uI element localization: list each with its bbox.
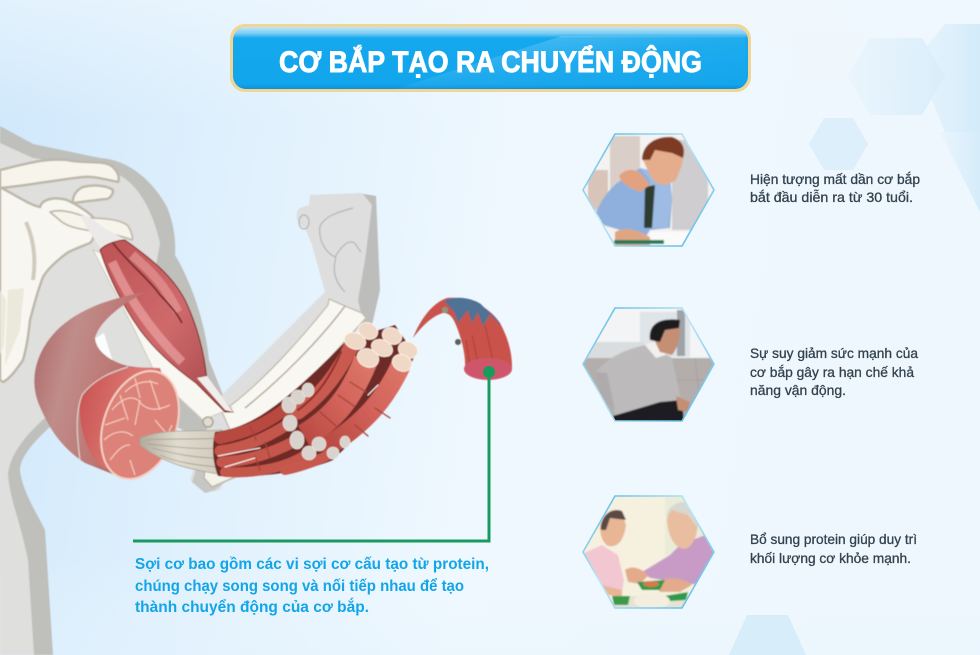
muscle bundle with cross-section [34, 292, 193, 490]
text: muscle loss from 30: bắt đầu diễn ra từ 30 tuổi. [750, 189, 913, 205]
tendon bundle [140, 430, 222, 474]
text: muscle loss from 30: Hiện tượng mất dần cơ bắp [750, 171, 920, 187]
text: protein supplement: Bổ sung protein giúp duy trì [750, 531, 917, 547]
text: strength decline: Sự suy giảm sức mạnh của [750, 345, 918, 361]
green leader line [133, 366, 495, 541]
gap between arm and torso [92, 333, 113, 362]
photo hexagon: man with shoulder pain [580, 130, 720, 250]
caption: muscle fibres: Sợi cơ bao gồm các vi sợi cơ cấu tạo từ protein, [135, 556, 489, 573]
title text: CƠ BẮP TẠO RA CHUYỂN ĐỘNG [279, 45, 702, 79]
text: strength decline: năng vận động. [750, 382, 846, 398]
caption: muscle fibres [135, 556, 489, 616]
single muscle fibre [413, 298, 512, 380]
fist and forearm silhouette [190, 193, 380, 493]
text: protein supplement [750, 531, 917, 566]
muscle fibre tubes [213, 325, 415, 476]
title banner [230, 24, 751, 92]
photo hexagon: man with back pain [582, 307, 715, 422]
grey fibre caps [282, 383, 350, 460]
illustration: arm anatomy [0, 126, 512, 655]
photo hexagon: elderly couple eating [580, 492, 720, 612]
text: protein supplement: khối lượng cơ khỏe mạnh. [750, 550, 911, 566]
biceps muscle [80, 215, 233, 412]
fibre cut ends [342, 320, 420, 374]
caption: muscle fibres: thành chuyển động của cơ bắp. [135, 597, 369, 616]
forearm bones [222, 299, 366, 430]
text: strength decline: cơ bắp gây ra hạn chế khả [750, 364, 914, 380]
body silhouette [0, 126, 225, 655]
text: muscle loss from 30 [750, 171, 920, 205]
shoulder bones [0, 160, 132, 382]
text: strength decline [750, 345, 918, 398]
caption: muscle fibres: chúng chạy song song và nối tiếp nhau để tạo [135, 577, 464, 595]
humerus [93, 250, 240, 487]
